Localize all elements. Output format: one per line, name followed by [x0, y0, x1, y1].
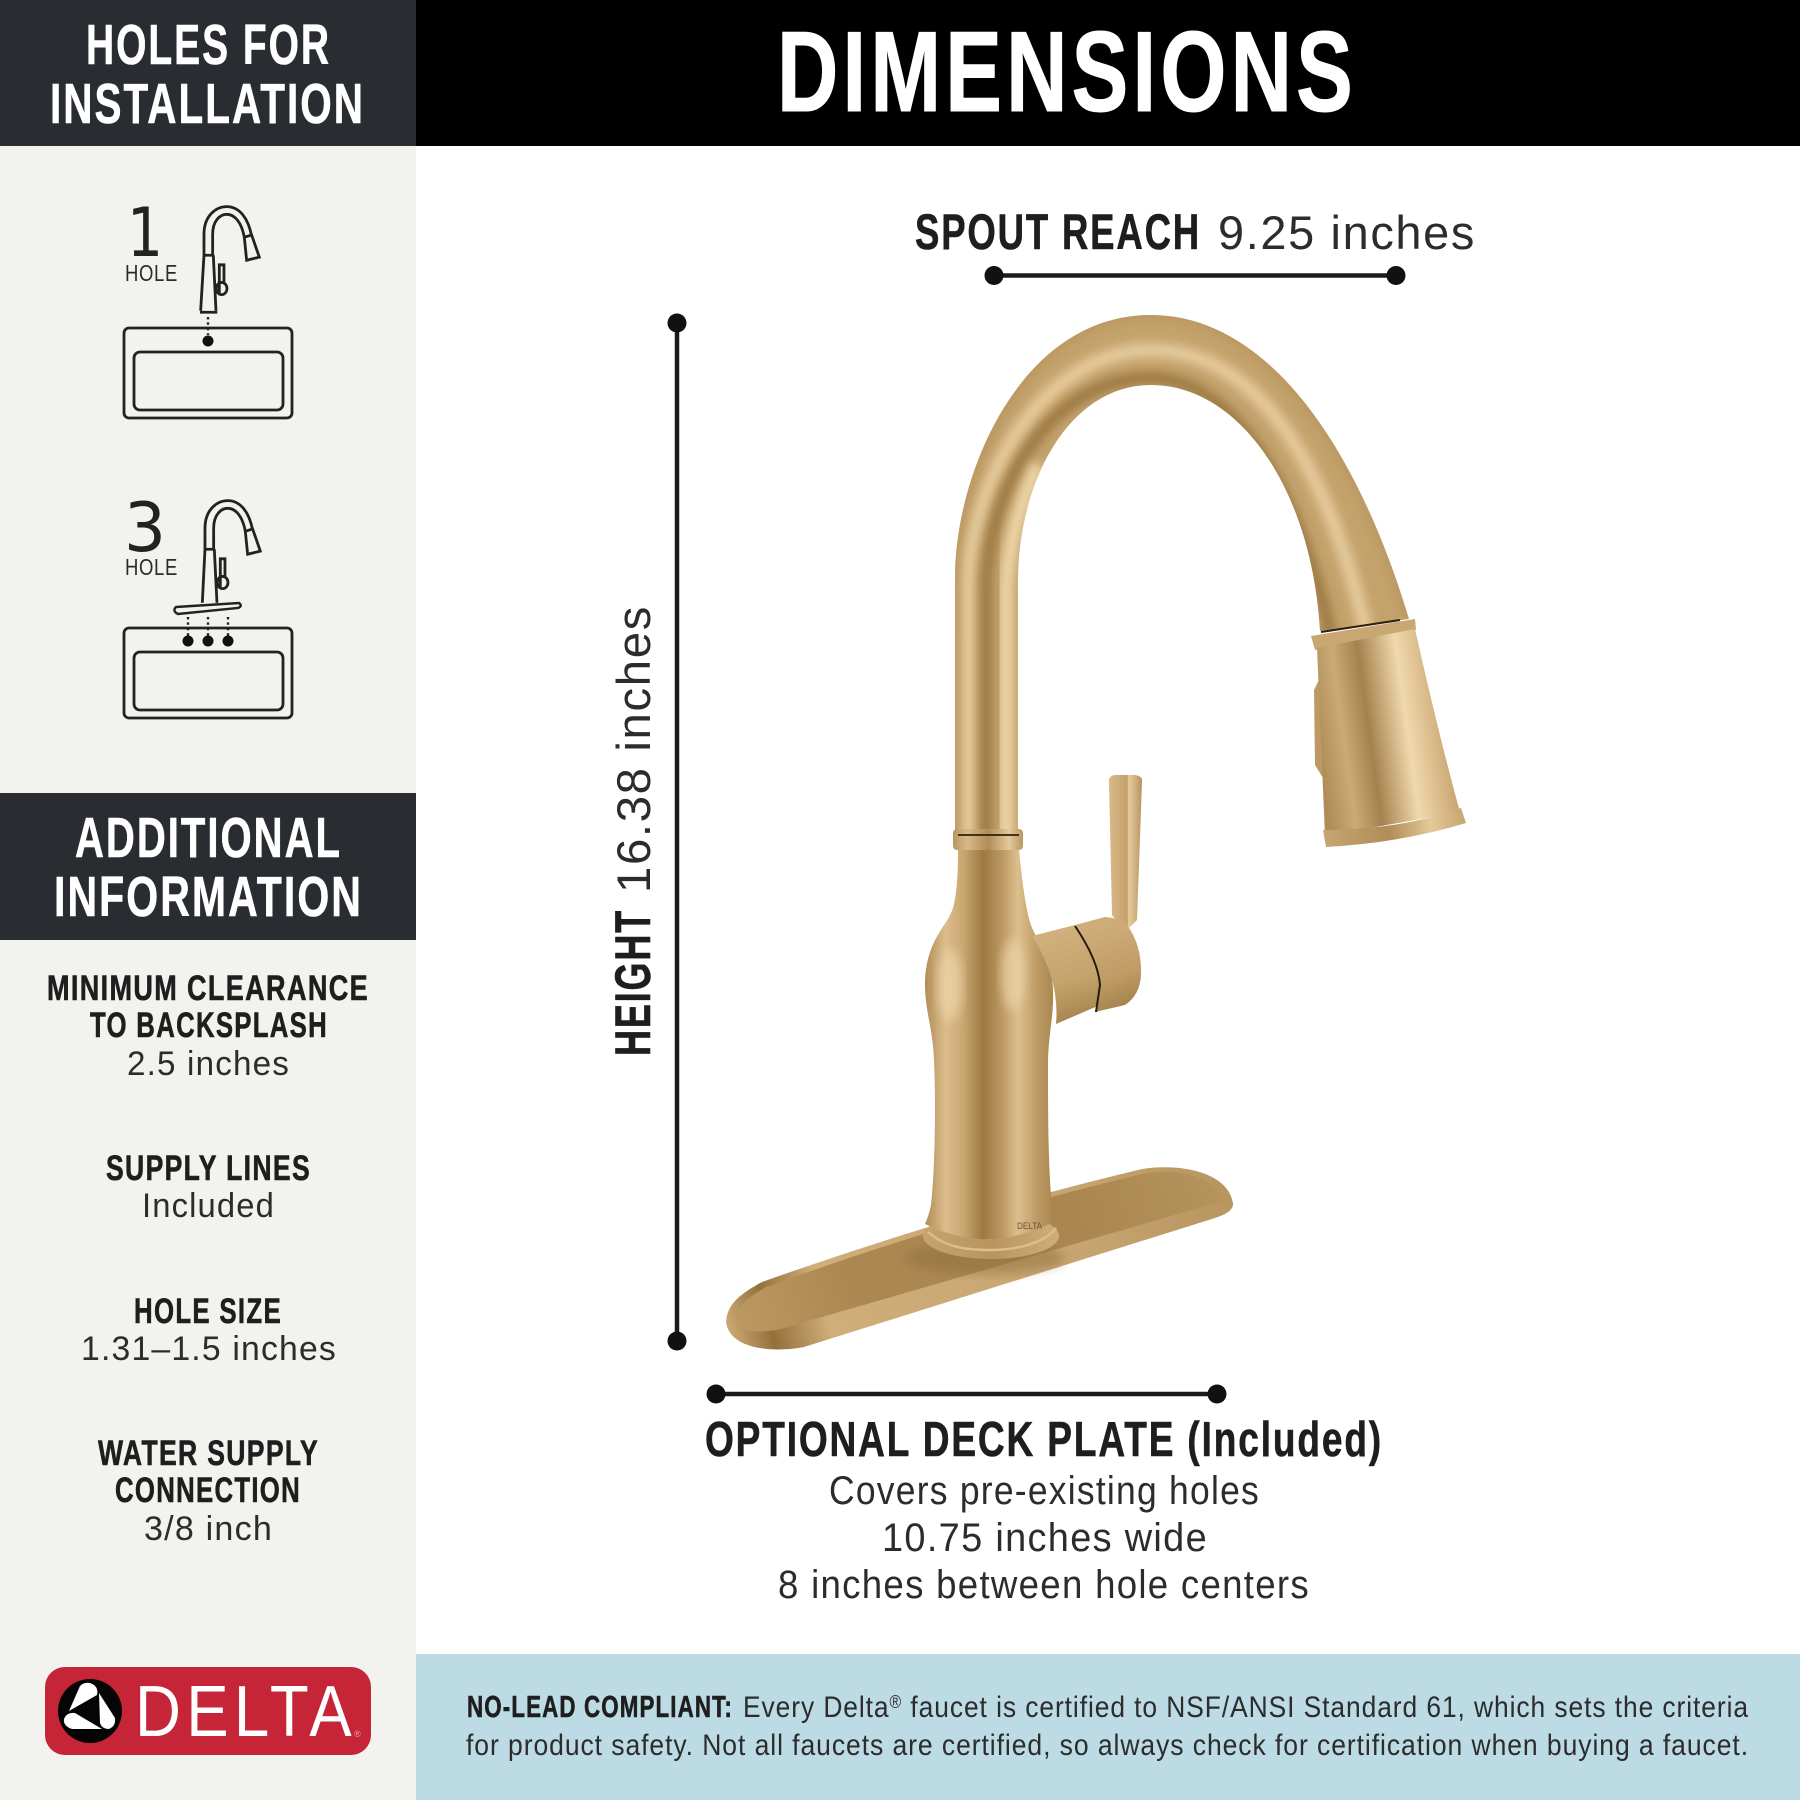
header: holes for installation: HOLES FOR — [86, 13, 331, 77]
arrow: deck plate dimension — [706, 1384, 1226, 1404]
arrow: spout reach dimension — [984, 266, 1406, 285]
header: additional information: ADDITIONAL — [75, 806, 342, 870]
label: spout reach — [915, 204, 1476, 260]
info: supply lines: SUPPLY LINES — [106, 1149, 311, 1188]
label: optional deck plate: Covers pre-existing holes — [829, 1469, 1260, 1513]
faucet illustration — [726, 315, 1466, 1349]
info: minimum clearance: 2.5 inches — [127, 1045, 290, 1083]
base ring and body: DELTA — [1017, 1221, 1042, 1231]
label: optional deck plate: 10.75 inches wide — [882, 1516, 1208, 1560]
info: water supply connection — [98, 1434, 319, 1548]
header: holes for installation — [0, 0, 416, 146]
label: spout reach: SPOUT REACH — [915, 204, 1201, 260]
panel: no-lead compliant note: NO-LEAD COMPLIANT: — [467, 1689, 733, 1724]
label: optional deck plate: 8 inches between hole centers — [778, 1563, 1310, 1607]
info: water supply connection: CONNECTION — [115, 1471, 301, 1510]
info: hole size — [81, 1292, 337, 1368]
icon: one hole installation: HOLE — [125, 260, 178, 286]
title: dimensions: DIMENSIONS — [777, 9, 1357, 136]
left sidebar panel — [0, 146, 416, 1800]
spray head — [1311, 619, 1466, 847]
header: additional information: INFORMATION — [54, 865, 363, 929]
deck plate — [726, 1167, 1233, 1349]
info: water supply connection: 3/8 inch — [144, 1510, 273, 1548]
delta logo: DELTA — [135, 1672, 357, 1752]
spout — [955, 315, 1409, 835]
label: optional deck plate: OPTIONAL DECK PLATE (Included) — [705, 1413, 1383, 1467]
label: height — [605, 605, 661, 1056]
panel: no-lead compliant note: Every Delta — [743, 1691, 910, 1724]
info: hole size: HOLE SIZE — [134, 1292, 282, 1331]
header: additional information — [0, 793, 416, 940]
icon: one hole installation — [124, 194, 292, 418]
info: water supply connection: WATER SUPPLY — [98, 1434, 319, 1473]
arrow: height dimension — [668, 314, 686, 1350]
info: supply lines — [106, 1149, 311, 1225]
icon: three hole installation: 3 — [124, 489, 166, 568]
title: dimensions — [416, 0, 1800, 146]
panel: no-lead compliant note — [416, 1654, 1800, 1800]
info: minimum clearance — [47, 969, 369, 1083]
label: height: 16.38 inches — [607, 605, 660, 893]
header: holes for installation: INSTALLATION — [50, 72, 365, 136]
spout shading — [955, 315, 1409, 840]
info: minimum clearance: MINIMUM CLEARANCE — [47, 969, 369, 1008]
icon: three hole installation: HOLE — [125, 554, 178, 580]
info: supply lines: Included — [142, 1187, 275, 1225]
base ring and body — [923, 829, 1059, 1259]
icon: three hole installation — [124, 489, 292, 718]
icon: one hole installation: 1 — [127, 194, 163, 273]
label: optional deck plate — [705, 1413, 1383, 1607]
delta logo: ® — [354, 1729, 361, 1739]
handle — [1032, 775, 1142, 1024]
panel: no-lead compliant note: ® — [890, 1692, 902, 1712]
delta logo — [45, 1667, 371, 1755]
label: spout reach: 9.25 inches — [1218, 206, 1476, 259]
label: height: HEIGHT — [605, 909, 661, 1056]
info: minimum clearance: TO BACKSPLASH — [90, 1006, 328, 1045]
info: hole size: 1.31–1.5 inches — [81, 1330, 337, 1368]
